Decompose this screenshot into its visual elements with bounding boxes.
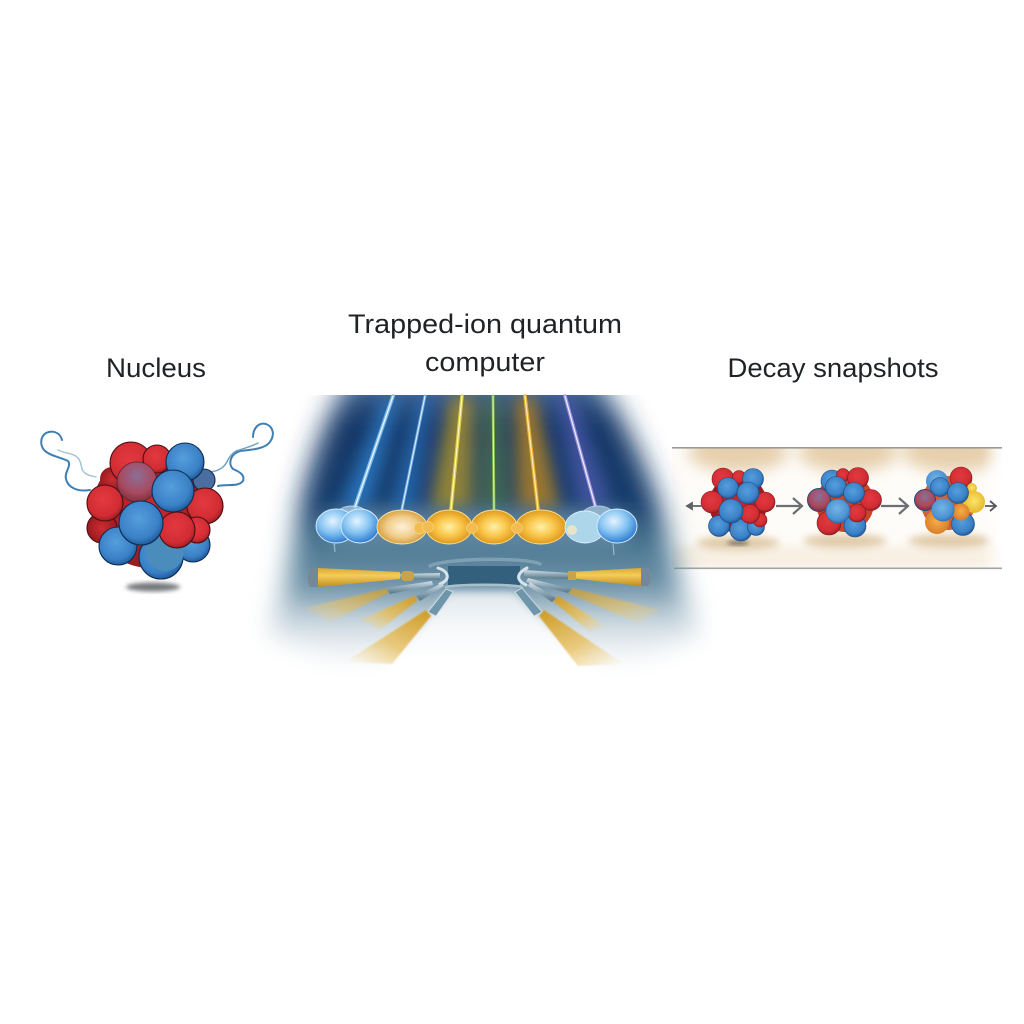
heading: Trapped-ion quantum computer: computer — [425, 347, 545, 377]
beam 4 — [493, 396, 494, 509]
ion: pale gold — [377, 510, 427, 544]
ion: blue right — [565, 506, 637, 555]
beam 6 — [565, 396, 595, 505]
white arch under the trap — [399, 586, 572, 660]
top right electrode — [524, 568, 651, 586]
trap rails — [430, 559, 540, 587]
heading: Trapped-ion quantum computer: Trapped-ion quantum — [348, 309, 622, 339]
ion bridges — [414, 522, 522, 534]
ion trap electrodes — [305, 559, 660, 666]
panel: trapped-ion quantum computer — [268, 375, 700, 685]
protons and neutrons — [110, 442, 152, 484]
wavy strand right — [207, 424, 273, 486]
ion: gold 4 — [516, 510, 566, 544]
shadow under nucleus — [126, 582, 180, 592]
beam 1 — [355, 396, 393, 507]
ion: gold 3 — [471, 510, 517, 544]
back spheres — [92, 452, 208, 568]
arrow: snapshot 2 to 3 — [881, 498, 908, 514]
panel: decay snapshots band — [672, 447, 1002, 570]
beam 5 — [525, 396, 538, 509]
ion: gold 2 — [426, 510, 472, 544]
illustration: nucleus — [41, 424, 273, 592]
left fan electrodes — [305, 581, 453, 664]
wavy strand left — [41, 432, 96, 491]
illustration: decay snapshot 1 — [701, 468, 775, 546]
illustration: decay snapshot 2 — [808, 468, 882, 537]
illustration: decay snapshot 3 — [914, 467, 985, 536]
trapped ions — [316, 506, 637, 555]
beam glow — [340, 396, 612, 509]
vacuum chamber glow — [262, 395, 706, 660]
right fan electrodes — [515, 578, 660, 666]
heading: Decay snapshots: Decay snapshots — [728, 353, 938, 383]
arrow: left of snapshot 1 — [687, 503, 702, 509]
beam 2 — [402, 396, 425, 509]
ion halo — [322, 508, 632, 544]
ion: blue left — [316, 506, 379, 552]
arrow: snapshot 1 to 2 — [776, 498, 802, 514]
heading: Nucleus: Nucleus — [106, 353, 206, 383]
laser beams — [355, 396, 595, 509]
arrow: right of snapshot 3 — [985, 501, 996, 511]
beam 3 — [451, 396, 462, 509]
top left electrode — [308, 568, 440, 587]
